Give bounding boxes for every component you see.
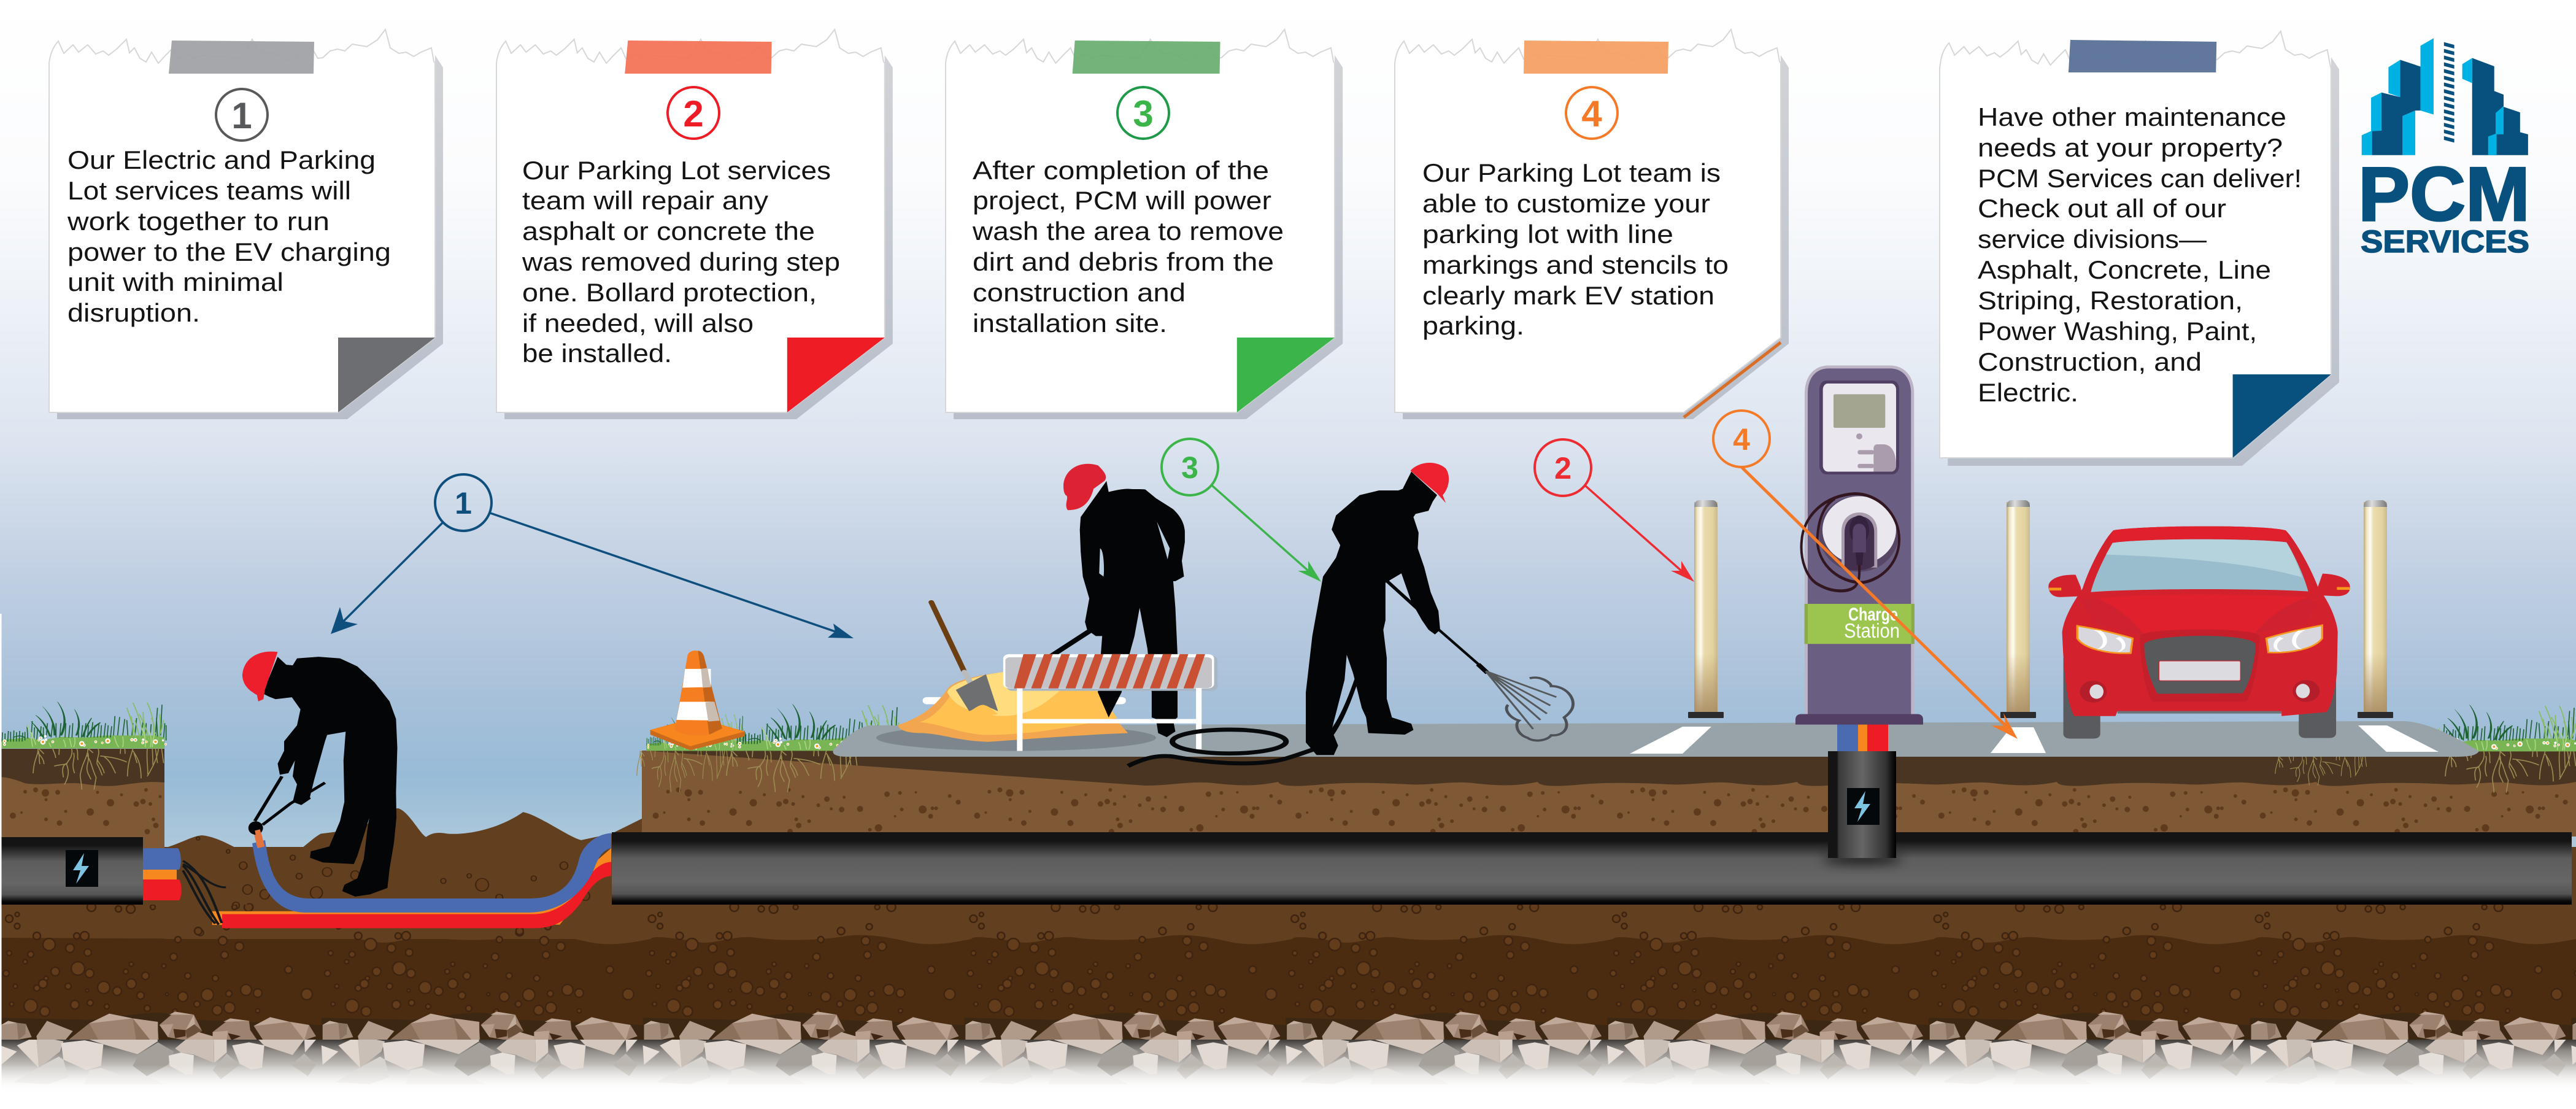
roots right (2445, 751, 2576, 793)
bollard center (2000, 500, 2036, 718)
worker 1 hard hat (242, 652, 277, 701)
note 2 number badge (668, 87, 719, 139)
note 1 number badge (216, 89, 268, 141)
pressure washer hose (1128, 730, 1324, 766)
shadow under conduit (1822, 854, 1902, 864)
note 2 text: one. Bollard protection, (522, 278, 817, 307)
note 3 text: dirt and debris from the (973, 247, 1274, 276)
shovel (931, 602, 998, 717)
note 4 text (1422, 158, 1729, 340)
note 2 text: was removed during step (522, 247, 840, 276)
grass patch center left (646, 713, 746, 751)
bolt cutters (250, 776, 325, 833)
barricade (1003, 654, 1217, 751)
copper wire tip (255, 829, 264, 848)
note 1 text: work together to run (67, 207, 330, 236)
roots left (33, 748, 164, 790)
roof (2109, 526, 2290, 543)
note 2 text: team will repair any (522, 186, 768, 215)
roots center left (637, 751, 728, 792)
rear barricade rail (923, 697, 1126, 705)
fog lamps (2080, 680, 2320, 703)
deep soil layer (0, 921, 2576, 1049)
note 3 text (972, 156, 1284, 338)
hood (2081, 595, 2318, 635)
charger display panel (1819, 381, 1899, 474)
note 2 (496, 29, 893, 419)
windshield (2091, 539, 2308, 592)
note 1 text: disruption. (67, 298, 200, 327)
charge station label (1844, 605, 1900, 642)
note 1 text: Our Electric and Parking (67, 145, 376, 174)
note 3 number badge: 3 (1133, 93, 1154, 134)
bollard left (1688, 500, 1724, 718)
callout 1 with arrows (331, 474, 854, 638)
callout 4 with arrow: 4 (1733, 422, 1750, 457)
note 5 text: Striping, Restoration, (1978, 286, 2243, 315)
arrow to repair area (490, 513, 854, 638)
grass patch right (2413, 705, 2576, 751)
note 5 text: Have other maintenance (1978, 102, 2286, 131)
green charge station band (1805, 604, 1915, 644)
charging socket and cord (1802, 493, 1899, 591)
note 5 text: service divisions— (1978, 225, 2207, 253)
note 2 text: be installed. (522, 339, 672, 368)
trench spoil mounds (164, 808, 644, 939)
callout 2 with arrow: 2 (1554, 451, 1571, 485)
side mirrors (2048, 574, 2350, 597)
note 4 text: markings and stencils to (1422, 250, 1729, 279)
note 4 (1395, 29, 1789, 419)
soil speckles (0, 784, 2576, 1025)
note 5 text: Power Washing, Paint, (1978, 317, 2257, 346)
callout 4 with arrow (1713, 411, 2018, 739)
grille and plate (2140, 630, 2260, 701)
note 5 text: PCM Services can deliver! (1978, 164, 2302, 193)
note 4 text: Our Parking Lot team is (1422, 158, 1721, 187)
arrow to trench worker (331, 522, 443, 634)
note 5 text: Electric. (1978, 378, 2078, 407)
water spray (1486, 671, 1573, 741)
sand pile (898, 672, 1128, 742)
trench worker (242, 652, 397, 897)
logo: PCM Services (2358, 38, 2530, 259)
spray wand (1386, 579, 1487, 673)
left soil block (0, 749, 164, 848)
construction site: sand pile, shovel, worker and barricade (876, 464, 1217, 751)
note 2 text (522, 156, 840, 368)
note 2 text: Our Parking Lot services (522, 156, 831, 185)
logo skyline icon (2362, 38, 2528, 155)
note 1 text: power to the EV charging (67, 238, 391, 266)
worker 3 silhouette (1306, 471, 1440, 755)
left conduit pipe (0, 837, 182, 905)
note 5 text: needs at your property? (1978, 133, 2283, 162)
roots under pavement right (2275, 757, 2367, 786)
note 2 text: asphalt or concrete the (522, 217, 815, 245)
note 1 text: unit with minimal (67, 268, 283, 296)
EV charging station (1795, 366, 1923, 725)
charge station label: Station (1844, 619, 1900, 642)
ground cross-section (0, 749, 2576, 1109)
icon: lightning badge (1847, 788, 1880, 825)
note 1 number badge: 1 (231, 95, 252, 136)
note 5 text: Construction, and (1978, 347, 2202, 376)
rock layer (0, 994, 2576, 1109)
charge station label: Charge (1848, 605, 1898, 625)
logo wordmark: SERVICES (2361, 224, 2529, 259)
worker 3 hard hat (1411, 463, 1449, 503)
note 5 text (1978, 102, 2302, 407)
car body (2062, 526, 2338, 716)
callout 2 with arrow (1535, 439, 1694, 582)
note 3 text: installation site. (973, 309, 1167, 338)
repair patch shadow (876, 725, 1156, 751)
note 2 text: if needed, will also (522, 309, 754, 338)
cable ends: blue, orange, red (143, 848, 182, 900)
note 3 text: construction and (973, 278, 1186, 307)
red car (2048, 526, 2350, 738)
sky background (0, 0, 2576, 871)
note 5 (1940, 31, 2339, 466)
note 3 text: wash the area to remove (972, 217, 1284, 245)
note 4 text: clearly mark EV station (1422, 281, 1714, 310)
note 2 number badge: 2 (683, 93, 704, 134)
traffic cone (650, 651, 745, 751)
page left margin strip (0, 614, 1, 1109)
note 5 text: Check out all of our (1978, 194, 2226, 223)
bollard right (2358, 500, 2393, 718)
note 4 text: able to customize your (1422, 189, 1710, 218)
main conduit pipe (612, 832, 2572, 905)
right soil block (642, 751, 2576, 837)
roots center right (727, 751, 857, 792)
note 4 text: parking. (1422, 311, 1524, 340)
note 3 (946, 29, 1343, 419)
note 3 text: After completion of the (973, 156, 1269, 185)
icon: lightning badge (66, 850, 98, 887)
upper dirt layer with wavy base (0, 847, 2576, 944)
note 4 number badge: 4 (1581, 93, 1602, 134)
callout 3 with arrow: 3 (1181, 450, 1198, 485)
note 1 text (67, 145, 391, 327)
worker 2 silhouette (1051, 481, 1185, 737)
feed cables (1837, 723, 1888, 752)
logo wordmark: PCM (2358, 152, 2530, 237)
note 1 text: Lot services teams will (67, 176, 351, 205)
headlights (2077, 625, 2322, 653)
worker 2 hard hat (1063, 464, 1106, 510)
note 3 number badge (1117, 87, 1169, 139)
tires (2064, 654, 2336, 738)
grass patch center right (736, 704, 902, 751)
note 1 (49, 29, 443, 419)
callout 1 with arrows: 1 (455, 486, 472, 520)
worker 1 silhouette (263, 657, 397, 897)
note 4 text: parking lot with line (1422, 220, 1673, 249)
vertical conduit with charger feed cables (1822, 723, 1902, 864)
pressure washing worker (1306, 463, 1573, 755)
paved parking lot (833, 721, 2479, 757)
callout 3 with arrow (1162, 439, 1321, 582)
note 5 text: Asphalt, Concrete, Line (1978, 255, 2271, 284)
note 4 number badge (1566, 87, 1618, 139)
grass patch left (1, 701, 167, 748)
note 3 text: project, PCM will power (973, 186, 1271, 215)
parking line markings (1630, 725, 2439, 754)
underground cables in trench (183, 830, 611, 928)
